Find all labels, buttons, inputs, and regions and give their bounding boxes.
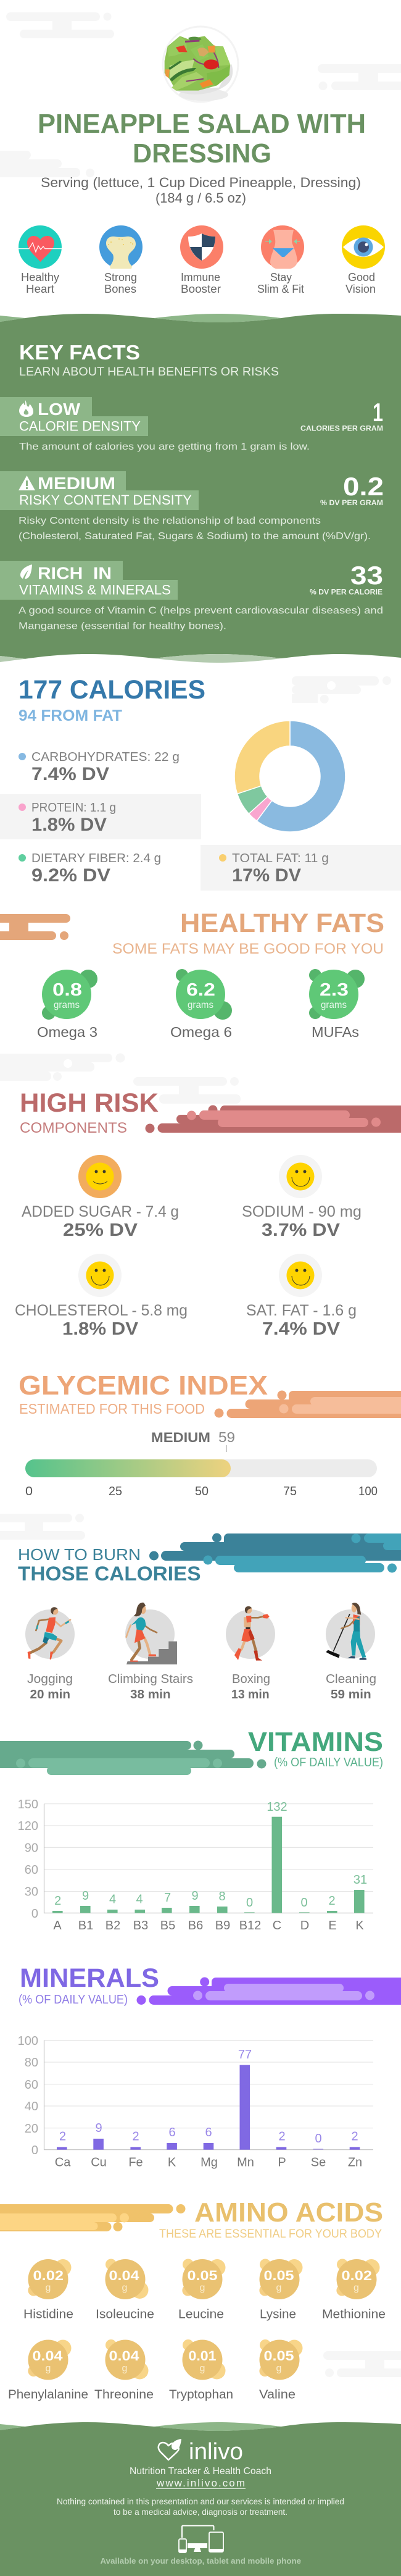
activity: climbing stairs: 38 min	[130, 1688, 170, 1701]
banner shape	[149, 1533, 401, 1572]
icon: stay slim and fit	[261, 225, 304, 269]
value labels: 31	[353, 1873, 367, 1887]
gauge scale: 100	[358, 1485, 378, 1498]
legend: total fat: 17% DV	[232, 865, 301, 886]
benefits row	[19, 225, 385, 295]
value labels: 6	[205, 2126, 212, 2139]
amino: threonine	[94, 2339, 154, 2401]
banner shape	[0, 1740, 267, 1775]
amino: threonine: 0.04	[109, 2348, 139, 2364]
legend: dietary fiber: DIETARY FIBER: 2.4 g	[31, 852, 161, 865]
amino: tryptophan	[169, 2339, 233, 2401]
y axis labels: 80	[25, 2056, 38, 2070]
y axis labels	[18, 2034, 38, 2157]
amino: leucine	[178, 2259, 226, 2321]
y axis labels: 100	[18, 2034, 38, 2048]
amino: phenylalanine: 0.04	[32, 2348, 63, 2364]
benefit labels: Healthy	[21, 271, 59, 283]
gauge scale: 75	[283, 1485, 297, 1498]
benefit labels: Vision	[345, 283, 376, 295]
value labels: 9	[95, 2121, 102, 2135]
activity: jogging: 20 min	[30, 1688, 70, 1701]
icon: warning triangle	[19, 476, 35, 490]
category labels: K	[168, 2155, 176, 2169]
amino: phenylalanine: g	[46, 2363, 51, 2374]
amino: methionine: 0.02	[342, 2268, 372, 2283]
y axis labels: 20	[25, 2122, 38, 2136]
value labels: 77	[238, 2048, 252, 2062]
value labels: 2	[59, 2130, 66, 2144]
panel: key facts	[0, 314, 401, 663]
benefit labels: Slim & Fit	[257, 283, 304, 295]
panel: amino acids	[0, 2197, 401, 2401]
fact: medium risky content density: Risky Content density is the relationship of bad components	[19, 516, 321, 526]
item: cholesterol	[15, 1254, 188, 1339]
value labels: 7	[164, 1891, 171, 1905]
category labels: D	[300, 1919, 309, 1932]
badge: omega 6: Omega 6	[170, 1024, 232, 1040]
serving size: (184 g / 6.5 oz)	[155, 190, 246, 206]
value labels: 4	[109, 1892, 116, 1906]
fact: low calorie density: 1	[373, 398, 383, 427]
gauge label: MEDIUM	[151, 1430, 210, 1445]
y axis labels: 90	[25, 1842, 38, 1855]
panel: footer	[0, 2422, 401, 2576]
y axis labels: 0	[31, 2144, 38, 2157]
gauge scale	[25, 1485, 378, 1498]
item: cholesterol: CHOLESTEROL - 5.8 mg	[15, 1302, 188, 1319]
serving size: Serving (lettuce, 1 Cup Diced Pineapple, Dressing)	[41, 175, 361, 190]
bar chart: minerals	[18, 2034, 373, 2169]
fact: rich in vitamins and minerals: % DV PER CALORIE	[310, 588, 382, 597]
heading: HOW TO BURN	[18, 1545, 141, 1564]
amino: tryptophan: 0.01	[189, 2348, 216, 2364]
value labels: 132	[267, 1800, 287, 1814]
serving size	[41, 175, 361, 206]
amino: lysine: 0.05	[264, 2268, 294, 2283]
subheading: SOME FATS MAY BE GOOD FOR YOU	[112, 941, 384, 957]
legend: protein	[0, 794, 201, 839]
icon: strong bones	[99, 225, 143, 269]
gauge bar	[25, 1459, 377, 1477]
subheading: THESE ARE ESSENTIAL FOR YOUR BODY	[159, 2228, 382, 2241]
y axis labels: 40	[25, 2100, 38, 2113]
amino: histidine: Histidine	[23, 2307, 73, 2321]
value labels	[54, 1800, 367, 1910]
background clouds: header	[0, 12, 401, 177]
badge: omega 3: Omega 3	[37, 1024, 97, 1040]
salad photo	[163, 27, 238, 102]
logo	[159, 2439, 243, 2465]
banner shape	[137, 1978, 401, 2005]
activity: cleaning	[326, 1603, 376, 1701]
amino: histidine: 0.02	[33, 2268, 64, 2283]
legend: protein: 1.8% DV	[31, 815, 107, 835]
activity: boxing: Boxing	[232, 1672, 270, 1686]
amino: phenylalanine	[8, 2339, 88, 2401]
subheading: ESTIMATED FOR THIS FOOD	[19, 1401, 205, 1417]
category labels: K	[355, 1919, 364, 1932]
fact: medium risky content density: MEDIUM	[38, 474, 115, 493]
item: added sugar	[22, 1155, 179, 1240]
fact: low calorie density: The amount of calories you are getting from 1 gram is low.	[19, 442, 310, 452]
value labels: 2	[328, 1894, 336, 1908]
item: added sugar: ADDED SUGAR - 7.4 g	[22, 1203, 179, 1220]
panel: vitamins	[0, 1727, 383, 1932]
fact: low calorie density: CALORIE DENSITY	[19, 419, 141, 434]
amino: threonine: g	[122, 2363, 127, 2374]
website link: www.inlivo.com	[156, 2477, 245, 2489]
category labels: B12	[239, 1919, 261, 1932]
title	[38, 109, 366, 169]
heading: VITAMINS	[248, 1727, 383, 1757]
banner shape	[0, 2204, 185, 2231]
background clouds: high risk	[0, 1054, 241, 1104]
banner shape	[146, 1105, 401, 1133]
legend: carbohydrates: 7.4% DV	[31, 764, 109, 784]
activity: jogging	[25, 1607, 75, 1701]
subheading: 94 FROM FAT	[19, 707, 122, 724]
amino: leucine: 0.05	[188, 2268, 217, 2283]
icon: healthy heart	[19, 225, 62, 269]
heading: GLYCEMIC INDEX	[19, 1370, 268, 1401]
value labels: 2	[132, 2130, 139, 2144]
fact: rich in vitamins and minerals: A good source of Vitamin C (helps prevent cardiovascular diseases) and	[19, 605, 383, 616]
item: saturated fat: SAT. FAT - 1.6 g	[246, 1302, 357, 1319]
amino: valine: 0.05	[264, 2348, 294, 2364]
amino: tryptophan: Tryptophan	[169, 2388, 233, 2401]
fact: low calorie density: LOW	[38, 400, 81, 419]
category labels: B3	[133, 1919, 148, 1932]
item: sodium: 3.7% DV	[262, 1220, 341, 1240]
category labels: B9	[215, 1919, 230, 1932]
legend: carbohydrates	[19, 750, 180, 784]
value labels: 0	[246, 1896, 253, 1910]
donut chart	[234, 721, 345, 832]
y axis labels: 150	[18, 1798, 38, 1811]
category labels: E	[328, 1919, 337, 1932]
value labels: 2	[54, 1894, 61, 1908]
category labels: B1	[78, 1919, 93, 1932]
subheading: (% OF DAILY VALUE)	[19, 1993, 128, 2007]
panel: minerals	[18, 1963, 401, 2169]
banner shape	[215, 1391, 401, 1418]
benefit labels: Stay	[270, 271, 292, 283]
background cloud: calories	[292, 676, 391, 703]
panel: healthy fats	[0, 908, 384, 1040]
item: sodium: SODIUM - 90 mg	[242, 1203, 362, 1220]
amino: valine: Valine	[259, 2388, 296, 2401]
gauge label	[151, 1429, 235, 1452]
amino: histidine	[23, 2259, 73, 2321]
activity: climbing stairs: Climbing Stairs	[108, 1672, 193, 1686]
benefit labels: Immune	[181, 271, 220, 283]
gauge scale: 50	[195, 1485, 209, 1498]
y axis labels: 60	[25, 1863, 38, 1877]
amino: isoleucine: g	[122, 2283, 127, 2293]
disclaimer: to be a medical advice, diagnosis or treatment.	[114, 2507, 287, 2517]
category labels: P	[278, 2155, 286, 2169]
category labels: A	[53, 1919, 62, 1932]
gauge label: 59	[218, 1429, 235, 1445]
gauge scale: 0	[25, 1485, 33, 1498]
amino: threonine: Threonine	[94, 2388, 154, 2401]
amino: lysine: Lysine	[260, 2307, 296, 2321]
fact: medium risky content density: (Cholesterol, Saturated Fat, Sugars & Sodium) to the amount (%DV/gr).	[19, 531, 371, 542]
badge: omega 3: 0.8	[52, 980, 82, 1000]
legend: protein: PROTEIN: 1.1 g	[31, 801, 116, 815]
amino: lysine	[259, 2259, 302, 2321]
legend: dietary fiber: 9.2% DV	[31, 865, 110, 886]
category labels: Cu	[91, 2155, 107, 2169]
fact: rich in vitamins and minerals: Manganese (essential for healthy bones).	[19, 621, 226, 631]
category labels: B2	[105, 1919, 120, 1932]
amino: isoleucine	[96, 2259, 154, 2321]
badge: mufas: MUFAs	[312, 1024, 359, 1040]
logo: inlivo	[189, 2439, 243, 2465]
bars	[57, 2065, 360, 2150]
heading: AMINO ACIDS	[194, 2197, 383, 2228]
value labels: 0	[300, 1896, 308, 1910]
benefit labels: Good	[348, 271, 375, 283]
activity: cleaning: 59 min	[331, 1688, 371, 1701]
category labels: Fe	[128, 2155, 143, 2169]
subheading: THOSE CALORIES	[18, 1563, 201, 1585]
item: saturated fat	[246, 1254, 357, 1339]
amino: methionine: g	[353, 2283, 359, 2293]
fact: medium risky content density	[0, 471, 384, 542]
y axis labels: 0	[31, 1907, 38, 1921]
category labels: Mg	[200, 2155, 218, 2169]
background cloud: burn	[0, 1514, 85, 1540]
legend: total fat	[200, 845, 401, 891]
category labels: B5	[160, 1919, 175, 1932]
y axis labels: 30	[25, 1885, 38, 1898]
amino: lysine: g	[276, 2283, 281, 2293]
heading: KEY FACTS	[19, 341, 140, 364]
benefit labels	[21, 271, 376, 295]
y axis labels	[18, 1798, 38, 1921]
item: added sugar: 25% DV	[63, 1220, 138, 1240]
fact: medium risky content density: 0.2	[343, 472, 384, 501]
availability note: Available on your desktop, tablet and mobile phone	[100, 2556, 301, 2566]
subheading: (% OF DAILY VALUE)	[274, 1756, 383, 1769]
amino: phenylalanine: Phenylalanine	[8, 2388, 88, 2401]
badge: omega 3	[37, 970, 97, 1040]
background cloud	[323, 2351, 401, 2377]
value labels: 2	[278, 2130, 286, 2144]
panel: calories	[0, 675, 401, 891]
amino: tryptophan: g	[200, 2363, 205, 2374]
gauge scale: 25	[109, 1485, 122, 1498]
legend: carbohydrates: CARBOHYDRATES: 22 g	[31, 750, 180, 764]
disclaimer: Nothing contained in this presentation and our services is intended or implied	[57, 2497, 344, 2506]
icon: leaf	[20, 564, 32, 579]
value labels: 8	[218, 1890, 226, 1903]
value labels: 4	[136, 1892, 143, 1906]
activity: climbing stairs	[108, 1603, 193, 1701]
amino: histidine: g	[46, 2283, 51, 2293]
category labels: Se	[311, 2155, 326, 2169]
amino: leucine: Leucine	[178, 2307, 224, 2321]
amino: leucine: g	[200, 2283, 205, 2293]
item: sodium	[242, 1155, 362, 1240]
fact: low calorie density: CALORIES PER GRAM	[300, 424, 383, 432]
activity: boxing	[226, 1606, 275, 1701]
amino: valine: g	[276, 2363, 281, 2374]
subheading: LEARN ABOUT HEALTH BENEFITS OR RISKS	[19, 366, 279, 379]
subheading: COMPONENTS	[20, 1120, 127, 1136]
category labels: Ca	[55, 2155, 71, 2169]
item: saturated fat: 7.4% DV	[262, 1319, 341, 1339]
fact: medium risky content density: % DV PER GRAM	[320, 498, 383, 507]
amino: isoleucine: Isoleucine	[96, 2307, 154, 2321]
item: cholesterol: 1.8% DV	[62, 1319, 139, 1339]
legend: total fat: TOTAL FAT: 11 g	[232, 852, 329, 865]
fact: rich in vitamins and minerals: VITAMINS & MINERALS	[19, 582, 171, 598]
badge: omega 6	[170, 969, 232, 1040]
fact: low calorie density	[0, 397, 383, 452]
title: PINEAPPLE SALAD WITH	[38, 109, 366, 139]
bar chart: vitamins	[18, 1798, 373, 1932]
value labels: 0	[315, 2132, 322, 2146]
icon: immune booster	[180, 225, 223, 269]
badge: omega 3: grams	[54, 1000, 80, 1010]
category labels	[53, 1919, 364, 1932]
title: DRESSING	[133, 138, 271, 169]
banner shape	[0, 914, 70, 940]
y axis labels: 60	[25, 2078, 38, 2092]
legend: dietary fiber	[19, 852, 161, 886]
icon: heart with leaf	[159, 2439, 181, 2460]
amino: valine	[259, 2339, 302, 2401]
heading: HIGH RISK	[20, 1088, 159, 1118]
benefit labels: Strong	[104, 271, 137, 283]
activity: jogging: Jogging	[27, 1672, 73, 1686]
tagline: Nutrition Tracker & Health Coach	[130, 2466, 271, 2477]
icon: flame	[19, 400, 33, 417]
value labels: 2	[351, 2130, 358, 2144]
bars	[52, 1817, 365, 1913]
badge: mufas: 2.3	[320, 980, 349, 1000]
badge: omega 6: grams	[188, 1000, 213, 1010]
amino: methionine	[322, 2259, 386, 2321]
heading: MINERALS	[20, 1963, 159, 1993]
heading: HEALTHY FATS	[180, 908, 384, 938]
activity: boxing: 13 min	[231, 1688, 270, 1701]
panel: high risk components	[15, 1088, 401, 1339]
icon: good vision	[342, 225, 385, 269]
value labels: 6	[168, 2126, 176, 2139]
y axis labels: 120	[18, 1819, 38, 1833]
panel: glycemic index	[19, 1370, 401, 1498]
category labels: C	[273, 1919, 281, 1932]
fact: rich in vitamins and minerals	[0, 561, 383, 631]
category labels: Zn	[348, 2155, 362, 2169]
benefit labels: Heart	[26, 283, 54, 295]
heading: 177 CALORIES	[19, 675, 205, 705]
fact: rich in vitamins and minerals: 33	[350, 561, 383, 590]
fact: medium risky content density: RISKY CONTENT DENSITY	[19, 492, 192, 508]
value labels: 9	[191, 1889, 199, 1903]
badge: mufas: grams	[321, 1000, 347, 1010]
amino: isoleucine: 0.04	[109, 2268, 139, 2283]
fact: rich in vitamins and minerals: RICH IN	[38, 563, 112, 583]
panel: how to burn those calories	[18, 1533, 401, 1701]
amino: methionine: Methionine	[322, 2307, 386, 2321]
benefit labels: Bones	[104, 283, 136, 295]
benefit labels: Booster	[181, 283, 221, 295]
value labels: 9	[82, 1889, 89, 1903]
category labels: Mn	[237, 2155, 254, 2169]
category labels	[55, 2155, 362, 2169]
disclaimer	[57, 2497, 344, 2517]
badge: omega 6: 6.2	[186, 980, 215, 1000]
badge: mufas	[309, 969, 365, 1040]
category labels: B6	[188, 1919, 203, 1932]
icon: devices	[179, 2526, 223, 2553]
value labels	[59, 2048, 358, 2146]
activity: cleaning: Cleaning	[326, 1672, 376, 1686]
